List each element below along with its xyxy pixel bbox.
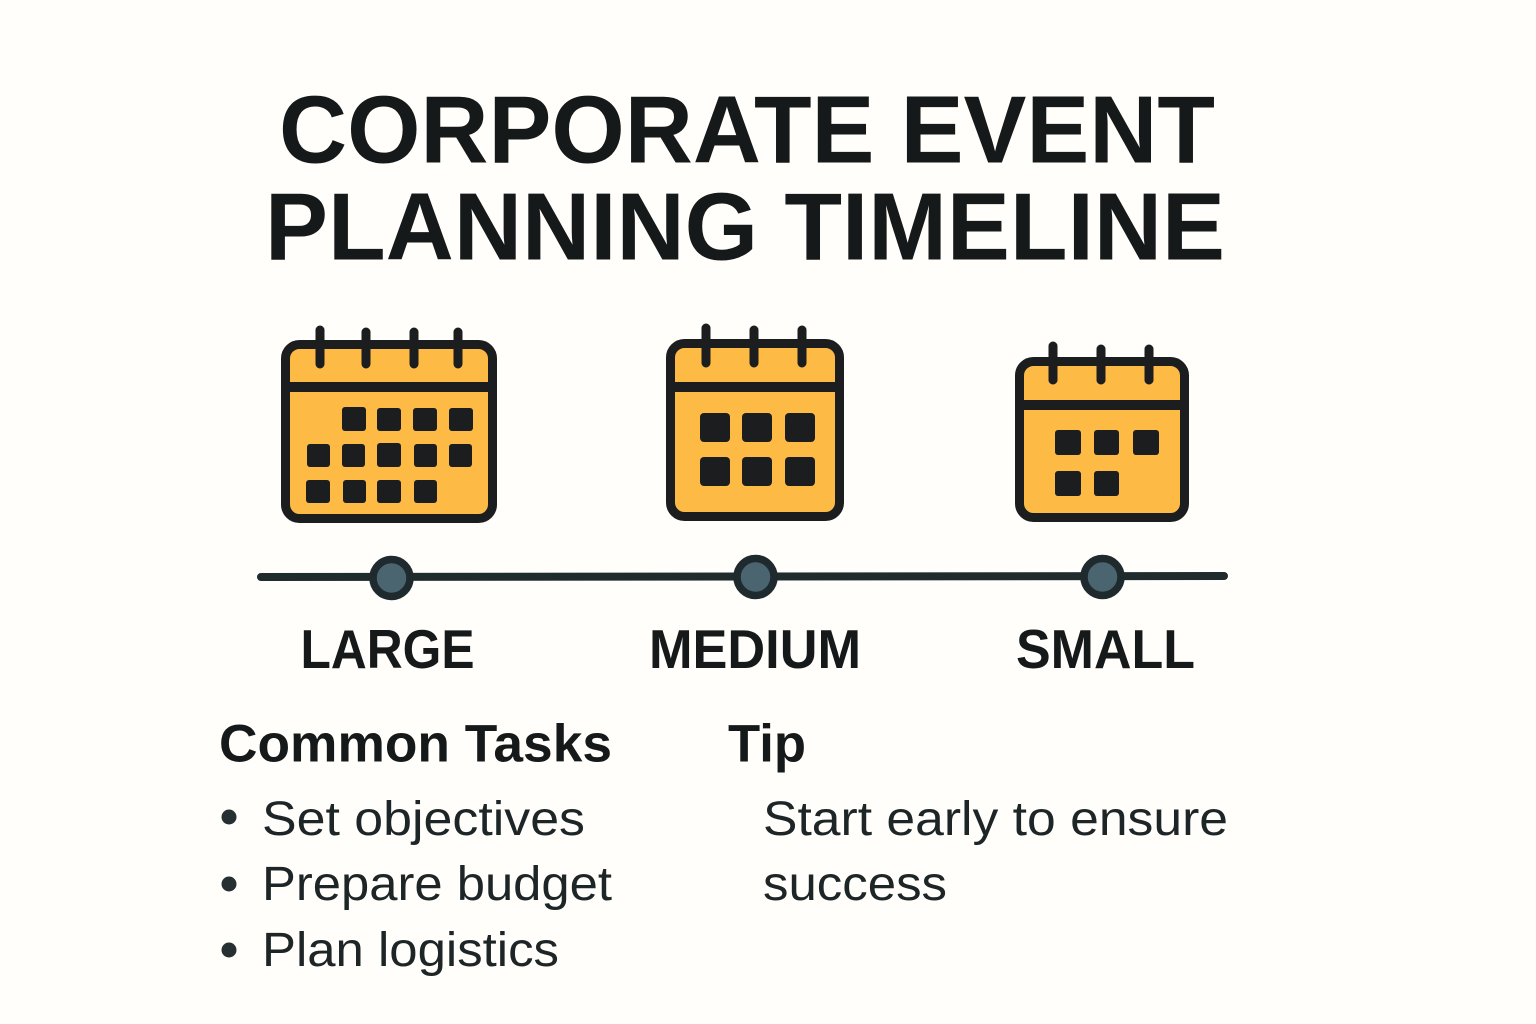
timeline: [261, 558, 1224, 596]
heading: common tasks: Common Tasks: [219, 714, 612, 774]
icon: medium calendar: [670, 328, 840, 516]
marker: small: [1084, 558, 1121, 596]
marker: medium: [737, 558, 774, 596]
label: medium: MEDIUM: [649, 618, 861, 680]
marker: large: [373, 560, 410, 596]
task: plan logistics: Plan logistics: [262, 924, 559, 977]
task: prepare budget: Prepare budget: [262, 858, 612, 911]
task list: [222, 793, 612, 977]
title: CORPORATE EVENT: [279, 76, 1215, 184]
icon: large calendar: [286, 330, 492, 518]
label: small: SMALL: [1016, 618, 1195, 680]
tip text: [763, 793, 1228, 911]
icon: small calendar: [1020, 346, 1184, 518]
tip text: Start early to ensure: [763, 793, 1228, 846]
task: set objectives: Set objectives: [262, 793, 585, 846]
title: PLANNING TIMELINE: [265, 174, 1225, 280]
label: large: LARGE: [300, 618, 474, 680]
tip text: success: [763, 858, 947, 911]
title: [265, 76, 1225, 280]
heading: tip: Tip: [728, 714, 806, 774]
